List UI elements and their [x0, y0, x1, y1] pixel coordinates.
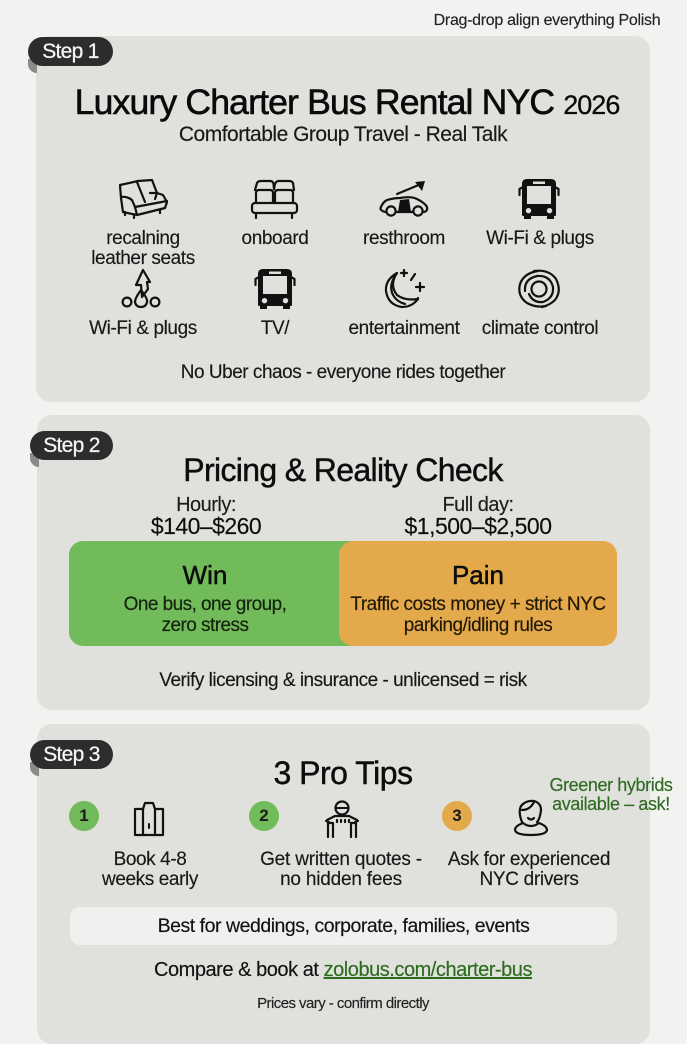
tip 3 number: [442, 801, 472, 831]
step 3 badge: [30, 740, 113, 769]
tip 3 text: NYC drivers: [479, 869, 579, 890]
callout: greener hybrids: [549, 775, 673, 814]
hourly price: [151, 494, 261, 539]
label: onboard: onboard: [242, 228, 308, 249]
icon: moon and stars: [384, 268, 426, 308]
icon: tv bus: [254, 269, 296, 309]
label: reclining seats: [91, 228, 195, 269]
step 2 badge: Step 2: [43, 434, 100, 457]
hourly price: Hourly:: [176, 494, 236, 516]
tip 2 number: 2: [259, 806, 269, 825]
label: tv: TV/: [261, 318, 289, 339]
note: no uber chaos: No Uber chaos - everyone rides together: [181, 362, 505, 383]
label: reclining seats: recalning: [106, 228, 180, 249]
tip 2 text: [260, 849, 422, 890]
full day price: $1,500–$2,500: [404, 513, 552, 539]
tip 2 text: no hidden fees: [280, 869, 402, 890]
tip 1 text: weeks early: [102, 869, 198, 890]
label: wi-fi and plugs: Wi-Fi & plugs: [486, 228, 594, 249]
label: wi-fi and plugs row 2: Wi-Fi & plugs: [89, 318, 197, 339]
note: verify licensing: Verify licensing & insurance - unlicensed = risk: [159, 670, 527, 691]
icon: drops and arrow: [122, 268, 160, 308]
step 3 badge: Step 3: [43, 743, 100, 766]
tip 1 text: Book 4-8: [114, 849, 186, 870]
pain text: [350, 594, 606, 636]
tip 2 text: Get written quotes -: [260, 849, 422, 870]
call to action: Compare & book at zolobus.com/charter-bus: [154, 959, 532, 981]
panel: step 3 tips: [37, 724, 650, 1044]
disclaimer: Prices vary - confirm directly: [257, 995, 429, 1012]
tip 2 number: [249, 801, 279, 831]
panel: step 1 features: [36, 36, 650, 402]
subtitle: Comfortable Group Travel - Real Talk: [179, 123, 507, 146]
title: Luxury Charter Bus Rental NYC 2026: [75, 82, 619, 122]
pain text: parking/idling rules: [404, 615, 552, 636]
top note: Drag-drop align everything Polish: [434, 12, 660, 29]
best for banner: [70, 907, 617, 945]
panel: step 2 pricing: [37, 415, 650, 710]
pain heading: Pain: [452, 560, 504, 590]
pain text: Traffic costs money + strict NYC: [350, 594, 606, 615]
tips heading: 3 Pro Tips: [273, 755, 413, 791]
step 2 badge: [30, 431, 113, 460]
step 1 badge: Step 1: [42, 40, 99, 63]
icon: onboard sofa: [250, 180, 298, 220]
tip 1 number: [69, 801, 99, 831]
tip 3 text: [448, 849, 610, 890]
icon: reclining seats: [118, 178, 168, 220]
step 1 badge: [28, 37, 113, 66]
tip 1 number: 1: [79, 806, 89, 825]
pain box: [339, 541, 617, 646]
tip 3 text: Ask for experienced: [448, 849, 610, 870]
win box: [69, 541, 359, 646]
icon: car with arrow: [379, 181, 428, 217]
best for banner: Best for weddings, corporate, families, events: [158, 915, 529, 937]
label: climate control: climate control: [482, 318, 598, 339]
icon: driver: [514, 800, 548, 836]
full day price: [404, 494, 552, 539]
callout: greener hybrids: available – ask!: [552, 794, 670, 814]
win text: One bus, one group,: [124, 594, 286, 615]
icon: climate swirl: [518, 270, 560, 308]
hourly price: $140–$260: [151, 513, 261, 539]
label: restroom: resthroom: [363, 228, 445, 249]
callout: greener hybrids: Greener hybrids: [549, 775, 673, 795]
icon: bus: [518, 179, 560, 219]
label: entertainment: entertainment: [348, 318, 459, 339]
pricing heading: Pricing & Reality Check: [183, 452, 503, 488]
tip 3 number: 3: [452, 806, 462, 825]
win text: zero stress: [162, 615, 248, 636]
icon: person at desk: [324, 800, 360, 838]
win text: [124, 594, 286, 636]
icon: calendar jacket: [134, 802, 164, 836]
win heading: Win: [183, 560, 227, 590]
full day price: Full day:: [442, 494, 514, 516]
tip 1 text: [102, 849, 198, 890]
label: reclining seats: leather seats: [91, 248, 195, 269]
